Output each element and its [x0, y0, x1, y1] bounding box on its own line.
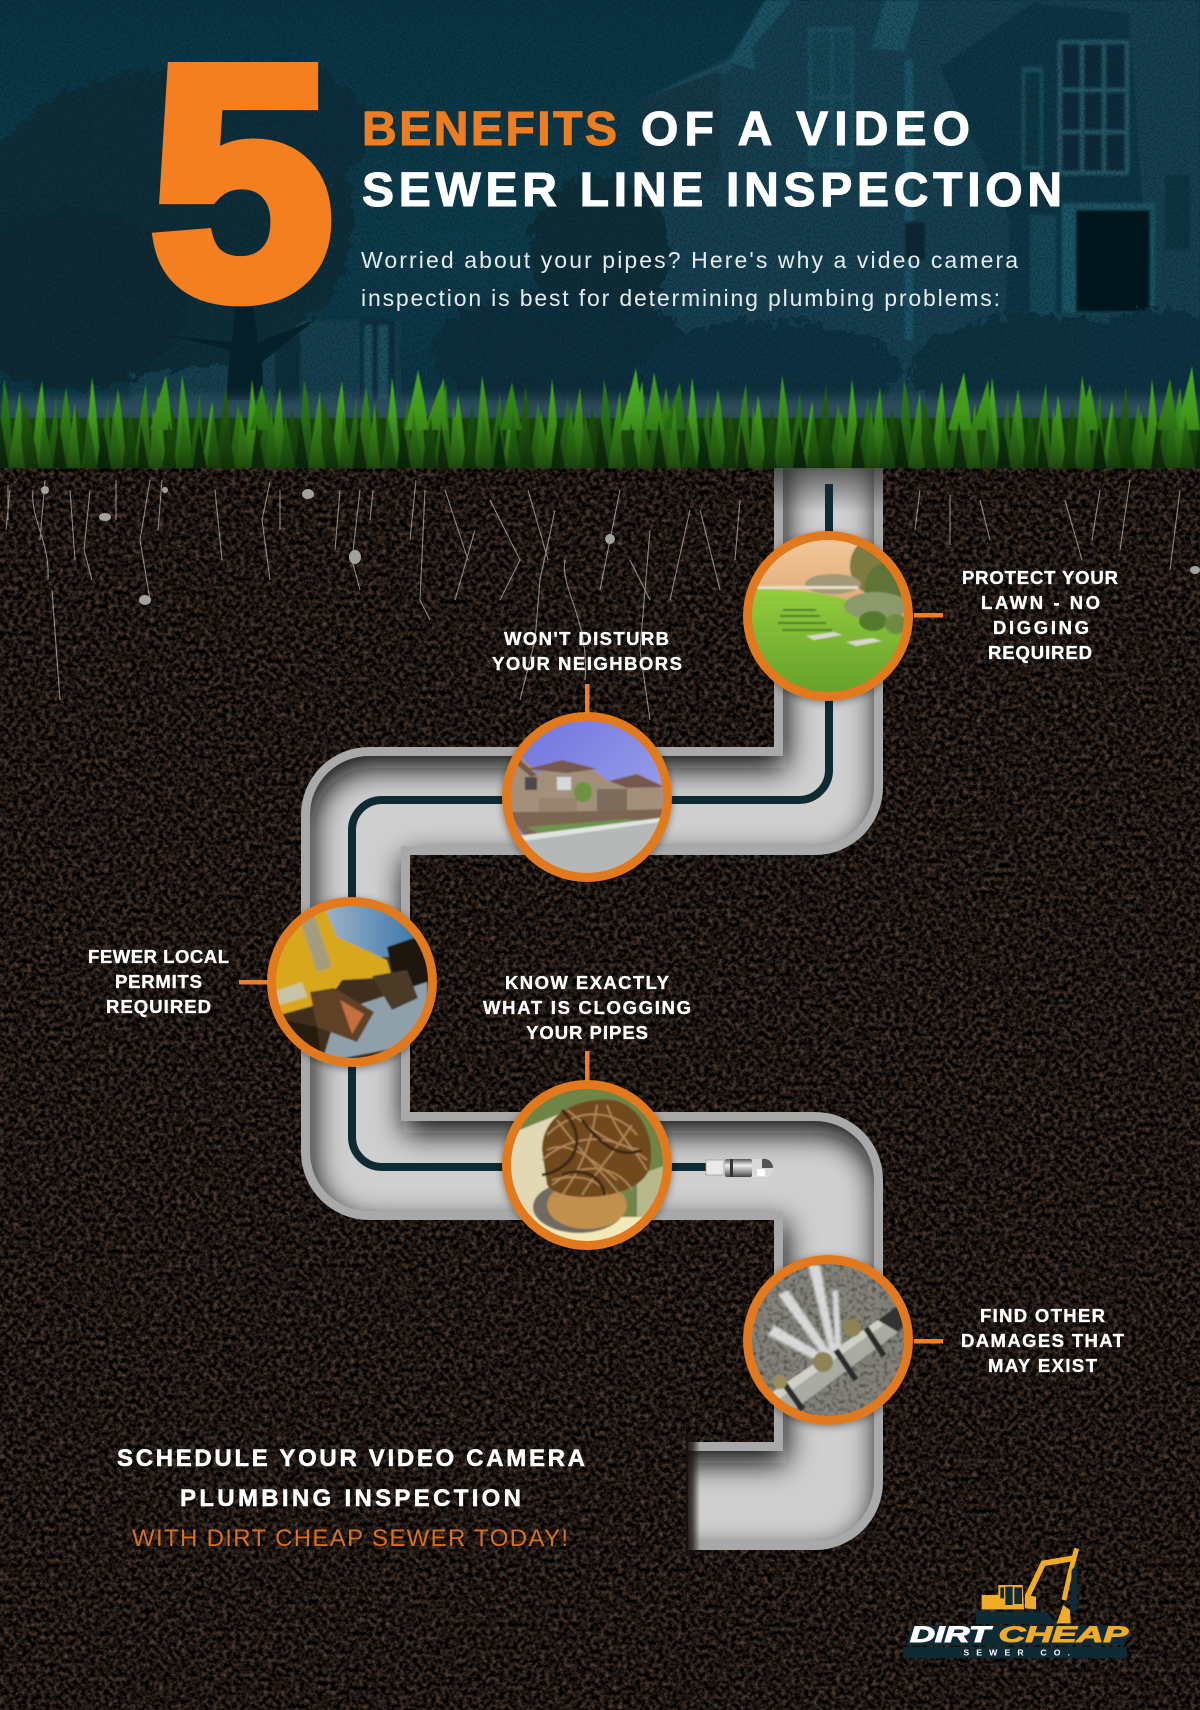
call to action: SCHEDULE YOUR VIDEO CAMERA [117, 1445, 585, 1472]
inspection camera head [706, 1159, 773, 1177]
title line one: BENEFITS [362, 103, 617, 156]
benefit 3 label: REQUIRED [106, 996, 211, 1017]
benefit 3: worker photo circle [272, 902, 432, 1062]
grass strip [0, 366, 1200, 468]
benefit 1 label: PROTECT YOUR [962, 567, 1118, 588]
benefit 4 label: YOUR PIPES [526, 1022, 648, 1043]
logo: Dirt Cheap Sewer Co.: CHEAP [999, 1622, 1129, 1647]
icon: excavator [976, 1548, 1077, 1624]
benefit 2 label: WON'T DISTURB [504, 628, 669, 649]
title line one [362, 103, 970, 156]
title line one: OF A VIDEO [641, 103, 970, 156]
logo: Dirt Cheap Sewer Co.: DIRT [910, 1622, 992, 1647]
logo: Dirt Cheap Sewer Co. [903, 1548, 1129, 1658]
benefit 1 label: LAWN - NO [981, 592, 1100, 613]
benefit 2: neighborhood photo circle [506, 716, 668, 878]
benefit 1 label [962, 567, 1118, 663]
house [130, 0, 1200, 400]
intro text: Worried about your pipes? Here's why a video camera [361, 247, 1018, 273]
soil background [0, 460, 1200, 1710]
call to action: WITH DIRT CHEAP SEWER TODAY! [132, 1525, 568, 1552]
benefit 4: clogged pipe roots photo circle [506, 1084, 668, 1247]
roots in the topsoil [6, 480, 1200, 720]
benefit 5 label: MAY EXIST [988, 1355, 1098, 1376]
sewer pipe [301, 468, 883, 1556]
benefit 5: leaking pipe photo circle [748, 1260, 908, 1420]
intro text [361, 247, 1018, 311]
benefit 5 label: FIND OTHER [980, 1305, 1105, 1326]
background: night house scene [0, 0, 1200, 470]
benefit 2 connector [585, 684, 590, 714]
call to action: PLUMBING INSPECTION [180, 1485, 521, 1512]
benefit 4 label [483, 972, 691, 1043]
benefit 4 label: WHAT IS CLOGGING [483, 997, 691, 1018]
benefit 1 connector [914, 613, 943, 618]
benefit 5 connector [914, 1339, 943, 1344]
title line two: SEWER LINE INSPECTION [362, 164, 1062, 217]
intro text: inspection is best for determining plumbing problems: [361, 285, 1000, 311]
camera cable [352, 484, 829, 1167]
benefit 1: lawn photo circle [748, 536, 915, 696]
benefit 3 label: PERMITS [115, 971, 202, 992]
call to action [117, 1445, 585, 1552]
benefit 2 label [492, 628, 682, 674]
number 5: 5 [150, 0, 333, 366]
benefit 4 label: KNOW EXACTLY [505, 972, 670, 993]
tall grass clumps [150, 366, 1200, 430]
benefit 5 label: DAMAGES THAT [961, 1330, 1125, 1351]
benefit 4 connector [585, 1051, 590, 1081]
benefit 5 label [961, 1305, 1125, 1376]
logo: Dirt Cheap Sewer Co.: SEWER CO. [963, 1647, 1070, 1657]
benefit 1 label: DIGGING [993, 617, 1089, 638]
benefit 2 label: YOUR NEIGHBORS [492, 653, 682, 674]
trees and bushes [0, 60, 1200, 425]
benefit 1 label: REQUIRED [988, 642, 1092, 663]
benefit 3 label [88, 946, 229, 1017]
benefit 3 label: FEWER LOCAL [88, 946, 229, 967]
benefit 3 connector [239, 980, 268, 984]
